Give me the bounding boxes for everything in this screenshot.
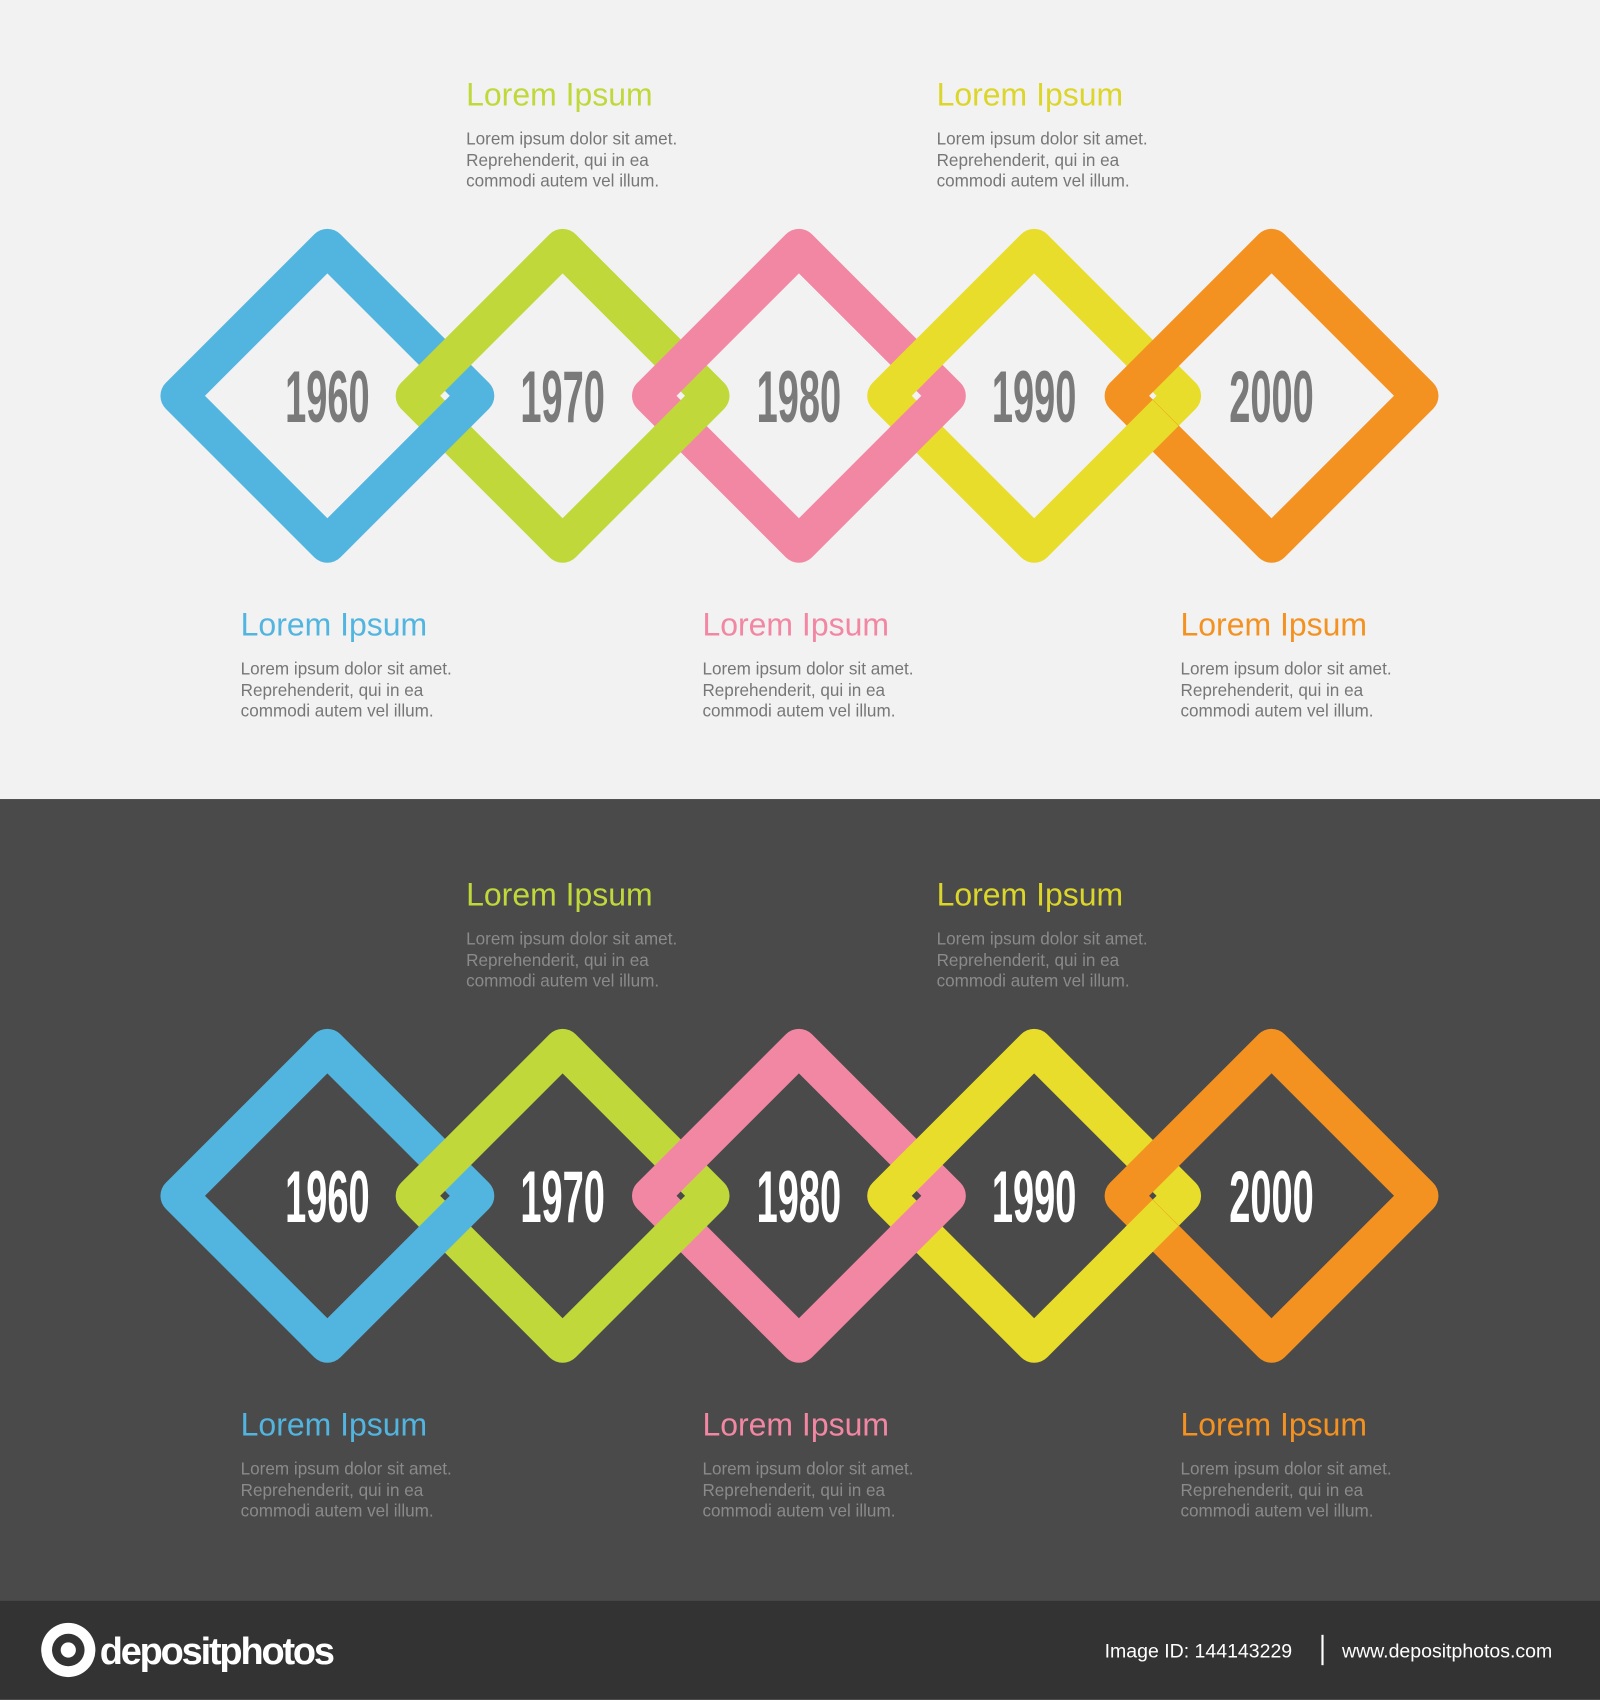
text block: 1980: Lorem ipsum dolor sit amet. [702, 659, 914, 678]
text block: 1970: Lorem Ipsum [466, 76, 653, 112]
text block: dark 1990: Lorem ipsum dolor sit amet. [937, 929, 1148, 948]
text block: dark 2000 [1180, 1406, 1392, 1521]
text block: dark 1960: Lorem Ipsum [241, 1406, 427, 1442]
text block: dark 2000: Lorem ipsum dolor sit amet. [1180, 1459, 1392, 1478]
year labels light [285, 355, 1314, 438]
text block: dark 2000: Lorem Ipsum [1180, 1406, 1367, 1442]
panel: light timeline [0, 0, 1600, 799]
text block: dark 1970: Lorem Ipsum [466, 876, 653, 912]
text block: 1970: Reprehenderit, qui in ea [466, 151, 649, 170]
diamond chain dark [179, 1047, 1420, 1344]
text block: dark 1980: Reprehenderit, qui in ea [702, 1481, 886, 1500]
year labels dark: 1980 [757, 1155, 841, 1238]
year labels dark [285, 1155, 1314, 1238]
icon: camera logo [41, 1623, 95, 1677]
logo text: depositphotos [100, 1631, 334, 1673]
text block: dark 1970: commodi autem vel illum. [466, 972, 659, 991]
text block: dark 2000: commodi autem vel illum. [1180, 1502, 1374, 1521]
year labels dark: 1970 [520, 1155, 605, 1238]
text block: dark 1960 [241, 1406, 452, 1521]
footer [0, 1600, 1600, 1700]
year labels light: 1970 [520, 355, 605, 438]
text block: 2000: Reprehenderit, qui in ea [1180, 681, 1364, 700]
website: www.depositphotos.com [1341, 1641, 1552, 1663]
text block: 2000 [1180, 606, 1392, 721]
text block: dark 1970: Reprehenderit, qui in ea [466, 951, 649, 970]
text block: 1970 [466, 76, 677, 191]
text block: 1990: Reprehenderit, qui in ea [937, 151, 1120, 170]
text block: dark 1980: Lorem ipsum dolor sit amet. [702, 1459, 914, 1478]
year labels dark: 2000 [1229, 1155, 1314, 1238]
text block: dark 1980: commodi autem vel illum. [702, 1502, 895, 1521]
text block: dark 1990: Lorem Ipsum [937, 876, 1123, 912]
text block: 1960: commodi autem vel illum. [241, 702, 434, 721]
text block: dark 1980 [702, 1406, 914, 1521]
text block: 1960: Lorem ipsum dolor sit amet. [241, 659, 452, 678]
text block: 1960 [241, 606, 452, 721]
year labels dark: 1990 [992, 1155, 1076, 1238]
text block: dark 1970: Lorem ipsum dolor sit amet. [466, 929, 677, 948]
text block: 1980 [702, 606, 914, 721]
text block: dark 1980: Lorem Ipsum [702, 1406, 889, 1442]
text block: 1980: Lorem Ipsum [702, 606, 889, 642]
text block: 1990: commodi autem vel illum. [937, 172, 1130, 191]
text block: 1970: commodi autem vel illum. [466, 172, 659, 191]
text block: dark 1960: Reprehenderit, qui in ea [241, 1481, 424, 1500]
text block: 1990: Lorem ipsum dolor sit amet. [937, 129, 1148, 148]
text block: 1960: Reprehenderit, qui in ea [241, 681, 424, 700]
image id: Image ID: 144143229 [1105, 1641, 1292, 1663]
text block: dark 1960: Lorem ipsum dolor sit amet. [241, 1459, 452, 1478]
text block: 1980: Reprehenderit, qui in ea [702, 681, 886, 700]
year labels light: 2000 [1229, 355, 1314, 438]
text block: dark 1960: commodi autem vel illum. [241, 1502, 434, 1521]
text block: 2000: Lorem Ipsum [1180, 606, 1367, 642]
text block: 1970: Lorem ipsum dolor sit amet. [466, 129, 677, 148]
year labels dark: 1960 [285, 1155, 370, 1238]
text block: 1990: Lorem Ipsum [937, 76, 1123, 112]
year labels light: 1960 [285, 355, 370, 438]
text block: dark 1990: commodi autem vel illum. [937, 972, 1130, 991]
panel: dark timeline [0, 799, 1600, 1600]
text block: dark 1970 [466, 876, 677, 991]
text block: dark 2000: Reprehenderit, qui in ea [1180, 1481, 1364, 1500]
diamond chain light [179, 247, 1420, 544]
text block: 2000: commodi autem vel illum. [1180, 702, 1374, 721]
text block: 1980: commodi autem vel illum. [702, 702, 895, 721]
text block: dark 1990 [937, 876, 1148, 991]
year labels light: 1980 [757, 355, 841, 438]
text block: 2000: Lorem ipsum dolor sit amet. [1180, 659, 1392, 678]
text block: 1960: Lorem Ipsum [241, 606, 427, 642]
year labels light: 1990 [992, 355, 1076, 438]
text block: 1990 [937, 76, 1148, 191]
text block: dark 1990: Reprehenderit, qui in ea [937, 951, 1120, 970]
